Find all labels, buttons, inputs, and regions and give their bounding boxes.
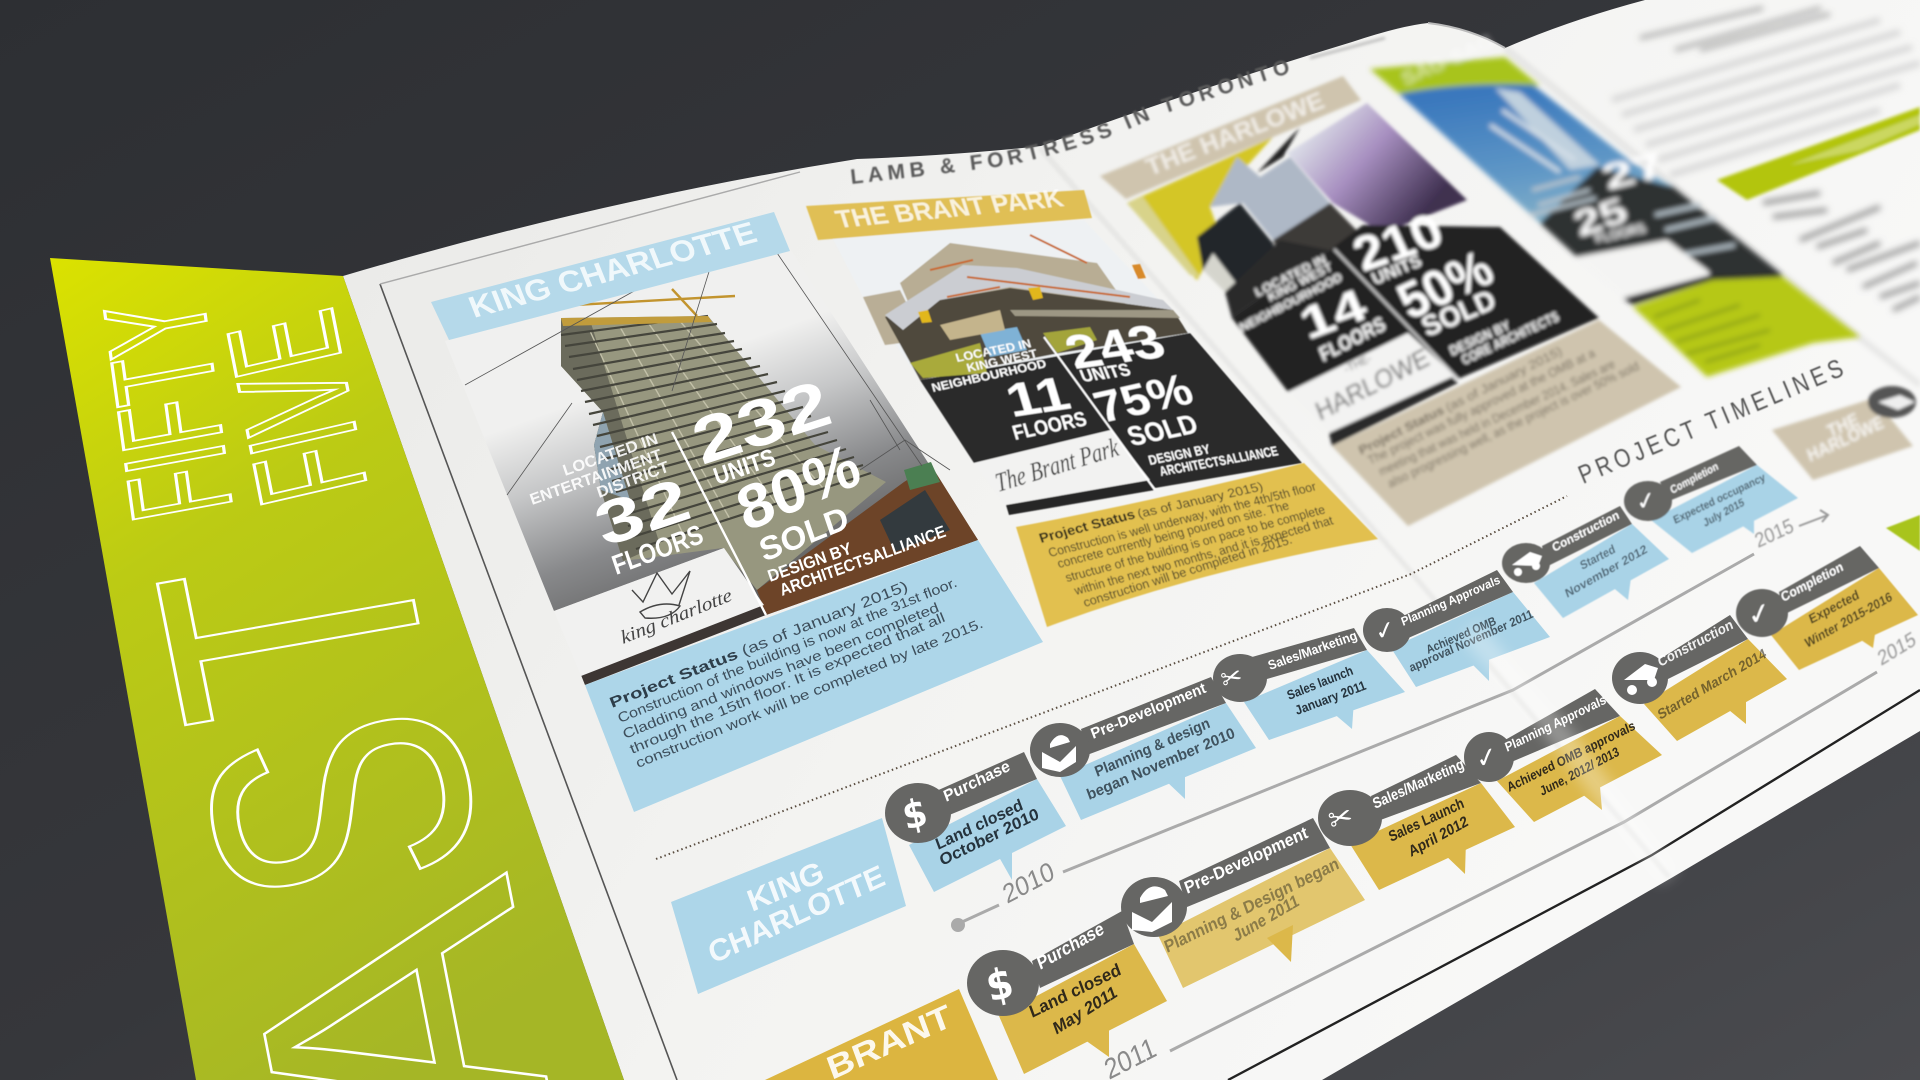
green corner: fourth timeline label [1886,515,1920,551]
stats: 25 [1568,191,1633,245]
tag: King Charlotte completion: ✓ [1633,485,1659,517]
logo: King Charlotte crown: king charlotte [618,585,734,648]
stats: UNITS [710,444,779,491]
stats: FLOORS [608,518,707,581]
stats: 11 [1000,367,1076,427]
stats: DESIGN BY [765,539,855,586]
tag: Brant Park completion: Completion [1779,560,1845,605]
stats block [1232,225,1599,392]
text: within the next two months, and it is expected that [1072,514,1335,598]
tag: King Charlotte pre-development: Pre-Development [1088,679,1209,742]
project status: (as of January 2015) [739,578,910,659]
stats: DESIGN BY [1447,318,1513,359]
heading band [1370,30,1540,94]
heading band: SAG-SAG [1398,30,1497,90]
timeline axis: The Brant Park [1100,628,1919,1080]
divider [1334,249,1458,379]
tag: Brant Park pre-development: Planning & Design began [1162,853,1341,957]
timeline axis: King Charlotte: 2010 [999,857,1058,910]
tag: Brant Park completion: Winter 2015-2016 [1803,589,1894,651]
timeline label: King Charlotte [671,818,906,994]
tag: Brant Park planning approvals: Planning Approvals [1503,691,1608,755]
stats: 27 [1596,145,1671,198]
tag: King Charlotte purchase: Land closed [933,796,1025,854]
tag: King Charlotte sales and marketing: January 2011 [1293,679,1369,718]
text: Construction is well underway, with the 4th/5th floor [1046,480,1318,560]
fold glare across the timelines [1470,630,1669,877]
tag: Brant Park purchase: Land closed [1027,960,1123,1022]
photo: sky and tower [1399,84,1780,277]
text: Construction of the building is now at the 31st floor. [615,574,959,726]
stats: 243 [1056,314,1173,379]
tag: King Charlotte planning approvals: Planning Approvals [1399,573,1502,629]
photo: tower under construction [445,246,978,685]
page paragraph lines [1612,20,1920,175]
flap title: East Fifty Five: T [80,522,507,744]
project status: through the 15th floor. It is expected that all [627,610,947,757]
stats: DISTRICT [595,458,672,501]
project status: concrete currently being poured on site. The [1055,498,1291,571]
logo box [1577,240,1710,297]
stats [1568,145,1671,247]
tag: King Charlotte completion [1624,446,1798,553]
timeline label: King Charlotte: KING [742,854,828,918]
stats [527,366,948,599]
tag: Brant Park sales and marketing: Sales/Marketing [1370,756,1466,813]
stats: NEIGHBOURHOOD [1237,269,1344,335]
photo: The Harlowe rendering [1127,103,1467,318]
tag: King Charlotte completion: July 2015 [1701,495,1746,529]
flap title: East Fifty Five: FIVE [195,297,400,518]
stats: SOLD [1123,409,1202,452]
panel: King Charlotte [431,212,1043,812]
project status: construction will be completed in 2015. [1081,533,1294,610]
tag: Brant Park purchase: Purchase [1034,918,1107,974]
page frame lines [380,38,1920,1080]
flap title: East Fifty Five: FIFTY [74,286,263,531]
tag: King Charlotte construction: Construction [1550,508,1621,555]
project status: Project Status [607,645,740,711]
text: structure of the building is on pace to be complete [1063,503,1327,585]
stats: 210 [1344,202,1452,282]
stats: 14 [1292,279,1374,349]
tag: Brant Park construction [1612,615,1787,741]
tag: Brant Park planning approvals [1464,689,1662,822]
stats: CORE ARCHITECTS [1459,308,1561,368]
stats: 75% [1087,365,1200,433]
tag: King Charlotte construction [1502,506,1669,618]
tag: King Charlotte sales and marketing: Sales launch [1285,664,1355,703]
section title: Lamb & Fortress in Toronto: LAMB & FORTRESS IN TORONTO [850,60,1290,185]
stats: UNITS [1369,251,1425,288]
panel: The Brant Park: THE BRANT PARK [832,184,1067,233]
tag: King Charlotte purchase [885,752,1066,892]
tag: Brant Park completion [1736,546,1918,670]
panel: fourth project (out of focus) [1370,30,1860,377]
project status [1623,273,1860,377]
flap title: East Fifty Five [74,286,634,1080]
stats: KING WEST [965,348,1040,375]
stats: SOLD [754,499,853,569]
tag: King Charlotte purchase: $ [898,789,931,839]
stats: SOLD [1417,285,1501,343]
tag: King Charlotte pre-development: began November 2010 [1085,725,1237,804]
project status: (as of January 2015) [1136,480,1265,521]
tag: King Charlotte completion: Completion [1669,460,1720,496]
tag: Brant Park planning approvals: Achieved OMB approvals [1505,719,1637,795]
stats: 80% [728,430,868,545]
dotted divider [656,496,1567,859]
logo: The Brant Park: The Brant Park [992,432,1122,498]
project status: The project was fully approved at the OMB at a [1365,346,1597,467]
heading: The Harlowe [1100,76,1361,199]
stats: 50% [1388,240,1503,330]
project status [1016,463,1378,627]
project status [1332,320,1681,526]
green cover flap [50,258,634,1080]
tag: Brant Park sales and marketing: ✂ [1324,797,1357,840]
text: Cladding and windows have been completed [620,600,941,742]
text: KING CHARLOTTE [464,216,762,324]
tag: King Charlotte sales and marketing: Sales/Marketing [1266,628,1359,673]
stats: KING WEST [1266,260,1335,305]
green side band [1717,107,1920,200]
tag: King Charlotte pre-development [1030,677,1256,820]
stats: 32 [586,465,698,560]
end label and arrow 2015: 2015 [1752,515,1797,553]
tag: Brant Park purchase [967,911,1167,1074]
page folds [1040,23,1920,877]
logo: The Harlowe: -THE- [1342,352,1373,376]
timeline axis: King Charlotte [951,510,1828,932]
timeline label: The Harlowe [1772,386,1916,480]
end label 2015: 2015 [1875,628,1919,671]
timeline label: The Harlowe: HARLOWE [1804,412,1887,466]
timeline label: King Charlotte: CHARLOTTE [703,858,889,970]
side list lines [1763,193,1920,310]
tag: Brant Park completion: ✓ [1745,595,1774,633]
tag: King Charlotte construction: Started [1578,542,1617,572]
tag: King Charlotte planning approvals: approval November 2011 [1407,607,1535,675]
tag: Brant Park construction: Started March 2014 [1656,646,1768,723]
panel: The Brant Park [806,184,1378,627]
tag: King Charlotte planning approvals: ✓ [1372,614,1398,647]
tag: Brant Park purchase: May 2011 [1051,982,1120,1039]
stats: FLOORS [1010,407,1089,444]
stats [930,314,1280,480]
logo: King Charlotte crown [554,548,764,676]
heading: The Harlowe: THE HARLOWE [1142,86,1328,181]
tag: Brant Park sales and marketing: Sales Launch [1386,795,1466,845]
photo: Brant Park building [833,220,1302,488]
tag: Brant Park planning approvals: June, 2012/ 2013 [1538,744,1621,799]
tag: King Charlotte planning approvals [1363,570,1550,687]
stats: NEIGHBOURHOOD [930,356,1048,395]
project status: Project Status [1356,402,1447,458]
tag: King Charlotte completion: Expected occupancy [1672,471,1768,527]
divider [1044,337,1155,490]
tag: King Charlotte purchase: Purchase [941,756,1012,805]
tag: Brant Park purchase: $ [982,959,1018,1012]
heading: The Brant Park [806,184,1092,240]
stats: ARCHITECTSALLIANCE [1158,444,1280,480]
timeline label: The Harlowe: THE [1824,409,1861,442]
project status [585,540,1043,812]
tag: King Charlotte sales and marketing [1213,628,1405,740]
end label and arrow 2015 [1752,510,1828,553]
right page copy (out of focus) [1612,8,1920,310]
page heading lines [1640,8,1830,50]
stats: FLOORS [1593,221,1648,247]
heading: King Charlotte [431,212,790,340]
tag: Brant Park sales and marketing [1318,755,1515,890]
stats: ARCHITECTSALLIANCE [777,522,948,599]
stats: ENTERTAINMENT [527,445,665,508]
stats: FLOORS [1316,312,1389,366]
tag: Brant Park completion: Expected [1807,588,1861,627]
logo: The Harlowe [1288,333,1458,446]
tag: King Charlotte purchase: October 2010 [937,804,1041,870]
stats: LOCATED IN [954,337,1033,365]
tag: King Charlotte pre-development: Planning & design [1092,714,1212,780]
tag: King Charlotte sales and marketing: ✂ [1217,659,1246,697]
text: construction work will be completed by late 2015. [633,616,985,771]
timeline label: The Brant Park [765,989,998,1080]
flap title: East Fifty Five: S [122,681,559,932]
tag: Brant Park construction: Construction [1655,616,1735,670]
tag: Brant Park sales and marketing: April 2012 [1406,812,1470,860]
tag: Brant Park pre-development: Pre-Development [1182,823,1311,898]
stats: LOCATED IN [1253,252,1328,300]
project status: (as of January 2015) [1443,343,1564,414]
project status: Project Status [1037,507,1137,546]
tag: Brant Park pre-development [1121,818,1365,988]
stats: UNITS [1077,361,1134,387]
stats: 232 [683,366,840,479]
tag: King Charlotte construction: November 2012 [1563,542,1650,601]
stats: DESIGN BY [1147,442,1213,468]
logo: The Harlowe: HARLOWE [1311,343,1433,426]
tag: Brant Park planning approvals: ✓ [1473,740,1501,776]
panel: The Harlowe [1100,76,1681,526]
stats [1237,202,1561,368]
tag: King Charlotte planning approvals: Achieved OMB [1424,614,1498,657]
logo: The Brant Park [974,430,1155,515]
stats: LOCATED IN [561,430,660,480]
tag: Brant Park pre-development: June 2011 [1231,891,1302,946]
divider [672,432,766,615]
